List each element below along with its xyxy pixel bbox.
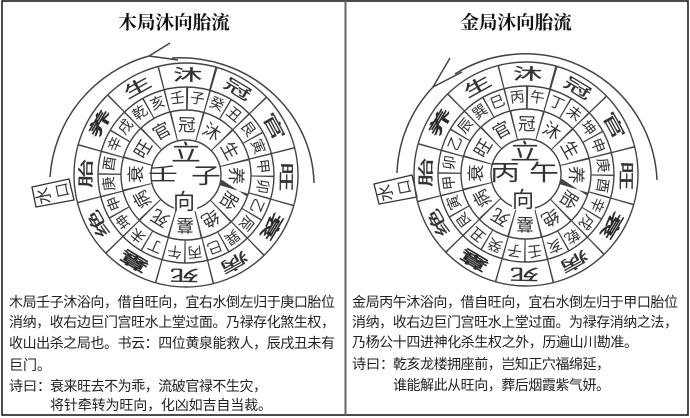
- middle ring: twenty-four mountains: 坤: [577, 117, 599, 139]
- water mouth box: metal bureau: [374, 175, 417, 204]
- center hub: facing: 向: [512, 188, 534, 212]
- outer ring: twelve stages: 绝: [84, 206, 113, 240]
- water mouth box: metal bureau: 水: [375, 183, 397, 203]
- description: wood bureau: 木局壬子沐浴向，借自旺向，宜右水倒左归于庚口胎位: [9, 294, 335, 310]
- outer ring: twelve stages: 沐: [173, 66, 202, 84]
- description: metal bureau: 消纳，收右边巨门宫旺水上堂过面。为禄存消纳之法，: [352, 314, 678, 330]
- middle ring: twenty-four mountains: 辰: [455, 116, 477, 137]
- outer ring: twelve stages: 生: [121, 73, 155, 102]
- middle ring: twenty-four mountains: 戌: [575, 211, 597, 233]
- inner ring: reversed stages: 生: [557, 137, 583, 162]
- water mouth box: metal bureau: 口: [395, 178, 415, 196]
- middle ring: twenty-four mountains: 乾: [129, 102, 151, 124]
- outer ring: twelve stages: 墓: [117, 246, 152, 276]
- flow arrow: metal bureau: [397, 54, 657, 180]
- inner ring: reversed stages: 生: [217, 138, 243, 163]
- inner ring: reversed stages: 衰: [126, 165, 146, 183]
- outer ring: twelve stages: 官: [259, 110, 288, 144]
- outer ring: twelve stages: 墓: [457, 245, 492, 275]
- center hub: facing: 壬: [148, 164, 178, 185]
- middle ring: twenty-four mountains: 申: [104, 193, 125, 213]
- middle ring: twenty-four mountains: 卯: [440, 154, 459, 171]
- middle ring: twenty-four mountains: 辛: [105, 134, 126, 154]
- middle ring: twenty-four mountains: 壬: [527, 241, 543, 260]
- description: wood bureau: [9, 294, 335, 413]
- middle ring: twenty-four mountains: 寅: [247, 137, 268, 157]
- middle ring: twenty-four mountains: 亥: [544, 235, 564, 256]
- center hub: facing: 向: [173, 190, 195, 214]
- middle ring: twenty-four mountains: 酉: [101, 155, 119, 172]
- outer ring: twelve stages: 冠: [560, 73, 595, 103]
- panel: metal bureau: [352, 12, 678, 393]
- inner ring: reversed stages: 墓: [516, 214, 534, 234]
- middle ring: twenty-four mountains: 庚: [593, 157, 612, 173]
- middle ring: twenty-four mountains: 壬: [169, 89, 185, 108]
- inner ring: reversed stages: 沐: [539, 118, 564, 144]
- description: metal bureau: 乃杨公十四进神化杀生权之外，历遍山川勘准。: [352, 334, 638, 350]
- outer ring: twelve stages: 死: [170, 266, 199, 284]
- middle ring: twenty-four mountains: 寅: [444, 192, 465, 212]
- outer ring: twelve stages: 旺: [277, 162, 295, 191]
- title: metal bureau: 金局沐向胎流: [460, 12, 572, 34]
- description: wood bureau: 巨门。: [9, 357, 51, 373]
- inner ring: reversed stages: 冠: [178, 115, 196, 135]
- outer ring: twelve stages: [417, 65, 635, 283]
- middle ring: twenty-four mountains: 乙: [446, 134, 466, 153]
- middle ring: twenty-four mountains: 巳: [488, 93, 508, 113]
- inner ring: reversed stages: [466, 114, 586, 234]
- middle ring: twenty-four mountains: 乙: [246, 196, 266, 215]
- description: wood bureau: 消纳，收右边巨门宫旺水上堂过面。乃禄存化煞生权，: [9, 314, 335, 330]
- inner ring: reversed stages: 绝: [198, 206, 223, 232]
- outer ring: twelve stages: 胎: [77, 159, 95, 188]
- description: metal bureau: [352, 294, 678, 393]
- outer ring: twelve stages: 养: [425, 105, 455, 140]
- panel: wood bureau: [9, 12, 335, 413]
- flow arrow: wood bureau: [50, 43, 314, 183]
- middle ring: twenty-four mountains: 巽: [221, 226, 242, 247]
- middle ring: twenty-four mountains: 丙: [509, 89, 525, 107]
- outer ring: twelve stages: 官: [599, 109, 628, 143]
- description: wood bureau: 收山出杀之局也。书云：四位黄泉能救人，辰戌丑未有: [9, 335, 335, 351]
- outer ring: twelve stages: 死: [510, 265, 539, 283]
- center hub: facing: 子: [191, 163, 221, 189]
- water mouth box: wood bureau: 口: [53, 181, 73, 199]
- middle ring: twenty-four mountains: 未: [563, 103, 585, 125]
- center hub: facing: 立: [171, 140, 201, 166]
- middle ring: twenty-four mountains: 甲: [441, 175, 459, 191]
- outer ring: twelve stages: 旺: [617, 161, 635, 190]
- description: wood bureau: 将针牵转为旺向，化凶如吉自当裁。: [50, 397, 272, 413]
- outer ring: twelve stages: 绝: [424, 205, 453, 239]
- inner ring: reversed stages: 养: [226, 167, 246, 185]
- center hub: facing: [490, 139, 559, 212]
- middle ring: twenty-four mountains: 癸: [207, 94, 227, 115]
- inner ring: reversed stages: [126, 115, 246, 235]
- middle ring: twenty-four mountains: 辰: [235, 212, 257, 233]
- description: wood bureau: 衰来旺去不为乖，流破官禄不生灾，: [50, 378, 267, 394]
- middle ring: twenty-four mountains: 乾: [561, 225, 583, 247]
- middle ring: twenty-four mountains: 坤: [113, 210, 135, 232]
- inner ring: reversed stages: 死: [148, 205, 173, 231]
- middle ring: twenty-four mountains: 艮: [237, 118, 259, 140]
- inner ring: reversed stages: 官: [489, 117, 514, 143]
- middle ring: twenty-four mountains: 辛: [586, 195, 607, 215]
- middle ring: twenty-four mountains: 未: [127, 224, 149, 246]
- outer ring: twelve stages: 衰: [257, 209, 287, 244]
- description: metal bureau: 金局丙午沐浴向，借自旺向，宜右水倒左归于甲口胎位: [352, 294, 678, 310]
- center hub: facing: 立: [510, 139, 540, 165]
- middle ring: twenty-four mountains: 子: [189, 89, 206, 108]
- middle ring: twenty-four mountains: [100, 89, 272, 261]
- inner ring: reversed stages: 养: [566, 166, 586, 184]
- middle ring: twenty-four mountains: 申: [587, 136, 608, 156]
- middle ring: twenty-four mountains: 丑: [223, 104, 244, 126]
- middle ring: twenty-four mountains: 戌: [115, 116, 137, 138]
- middle ring: twenty-four mountains: 卯: [253, 178, 272, 195]
- outer ring: twelve stages: 衰: [597, 208, 627, 243]
- outer ring: twelve stages: 生: [461, 72, 495, 101]
- middle ring: twenty-four mountains: 甲: [253, 158, 271, 174]
- middle ring: twenty-four mountains: 巽: [470, 102, 491, 123]
- compass wheel: metal bureau: [403, 51, 649, 297]
- outer ring: twelve stages: 冠: [220, 74, 255, 104]
- middle ring: twenty-four mountains: [440, 88, 612, 260]
- water mouth box: wood bureau: 水: [33, 186, 55, 206]
- middle ring: twenty-four mountains: 庚: [100, 176, 119, 192]
- inner ring: reversed stages: 病: [469, 186, 495, 211]
- middle ring: twenty-four mountains: 丑: [468, 223, 489, 245]
- outer ring: twelve stages: 胎: [417, 158, 435, 187]
- inner ring: reversed stages: 死: [488, 204, 513, 230]
- inner ring: reversed stages: 墓: [176, 215, 194, 235]
- center hub: facing: 丙: [490, 160, 520, 186]
- inner ring: reversed stages: 旺: [130, 137, 156, 162]
- inner ring: reversed stages: 病: [129, 187, 155, 212]
- inner ring: reversed stages: 旺: [470, 136, 496, 161]
- water mouth box: wood bureau: [32, 179, 74, 207]
- inner ring: reversed stages: 绝: [538, 205, 563, 231]
- compass wheel: wood bureau: [63, 52, 309, 298]
- middle ring: twenty-four mountains: 巳: [204, 236, 224, 256]
- middle ring: twenty-four mountains: 丁: [146, 235, 165, 255]
- description: metal bureau: 诗曰：: [352, 356, 394, 372]
- center hub: facing: 午: [529, 160, 559, 186]
- inner ring: reversed stages: 沐: [199, 119, 224, 145]
- outer ring: twelve stages: 养: [85, 106, 115, 141]
- middle ring: twenty-four mountains: 癸: [485, 234, 505, 255]
- middle ring: twenty-four mountains: 午: [166, 242, 183, 261]
- inner ring: reversed stages: 胎: [216, 188, 242, 213]
- middle ring: twenty-four mountains: 午: [529, 88, 546, 107]
- middle ring: twenty-four mountains: 丁: [547, 94, 566, 114]
- inner ring: reversed stages: 冠: [518, 114, 536, 134]
- center hub: facing: [148, 140, 221, 214]
- inner ring: reversed stages: 胎: [556, 187, 582, 212]
- outer ring: twelve stages: 沐: [513, 65, 542, 83]
- description: metal bureau: 谁能解此从旺向，葬后烟霞紫气妍。: [393, 377, 610, 393]
- middle ring: twenty-four mountains: 亥: [148, 93, 168, 114]
- middle ring: twenty-four mountains: 酉: [593, 177, 611, 194]
- description: metal bureau: 乾亥龙楼拥座前，岂知正穴福绵延，: [393, 356, 610, 372]
- inner ring: reversed stages: 官: [149, 118, 174, 144]
- outer ring: twelve stages: [77, 66, 295, 284]
- middle ring: twenty-four mountains: 丙: [187, 242, 203, 260]
- middle ring: twenty-four mountains: 艮: [453, 209, 475, 231]
- outer ring: twelve stages: 病: [557, 247, 591, 276]
- description: wood bureau: 诗曰：: [9, 378, 51, 394]
- title: wood bureau: 木局沐向胎流: [118, 12, 230, 34]
- inner ring: reversed stages: 衰: [466, 164, 486, 182]
- outer ring: twelve stages: 病: [217, 248, 251, 277]
- middle ring: twenty-four mountains: 子: [506, 241, 523, 260]
